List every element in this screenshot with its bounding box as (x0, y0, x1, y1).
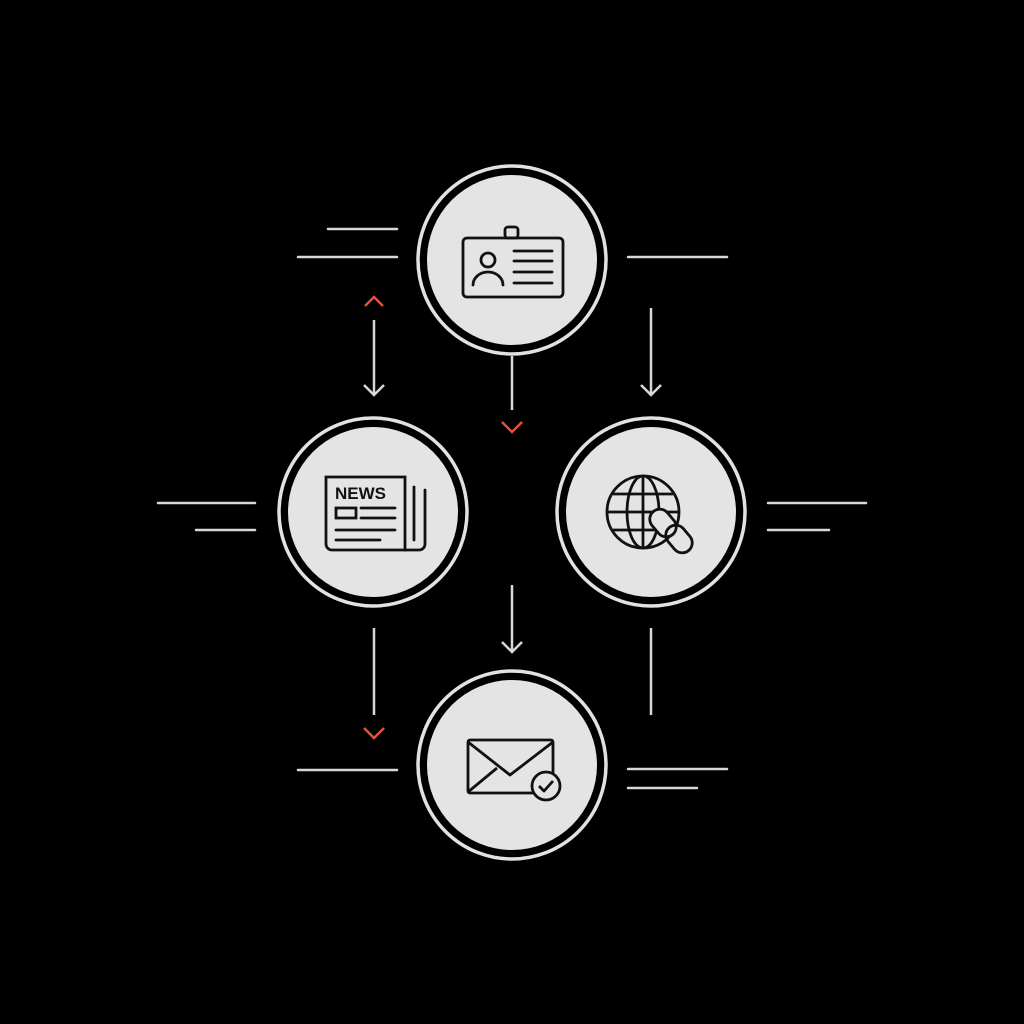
circle: globe link (557, 418, 745, 606)
arrow: top to center (502, 356, 522, 432)
icon: envelope with check (468, 740, 560, 800)
arrow: left lower (364, 628, 384, 738)
icon: newspaper (326, 477, 425, 550)
icon: ID card (463, 227, 563, 297)
arrow: left bidirectional (364, 297, 384, 395)
circle: news (279, 418, 467, 606)
arrow: right down (641, 308, 661, 395)
circle: email check (418, 671, 606, 859)
icon: globe with link (607, 476, 696, 557)
circle: ID card (418, 166, 606, 354)
connector: right lower (650, 628, 652, 715)
arrow: center down (502, 585, 522, 652)
circle: news: NEWS (335, 484, 386, 503)
